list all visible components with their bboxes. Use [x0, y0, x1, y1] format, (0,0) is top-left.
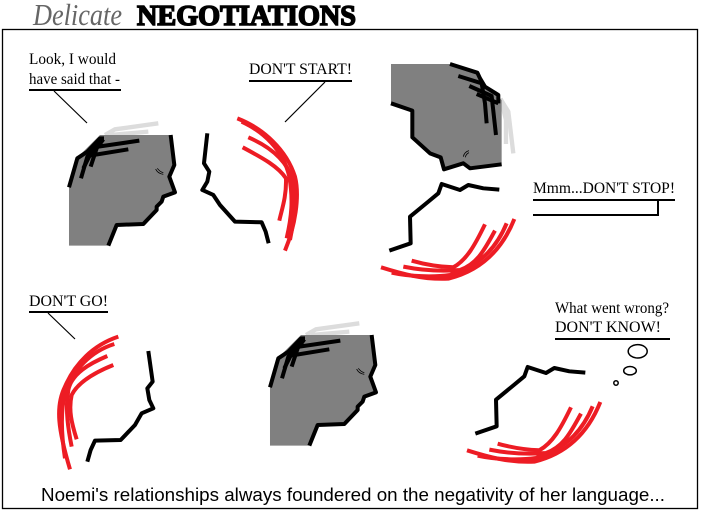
speech: look, I would have said that	[29, 51, 121, 123]
thought: what went wrong: What went wrong?	[555, 300, 669, 317]
panel: bottom-right scene	[467, 300, 670, 462]
thought: what went wrong: DON'T KNOW!	[555, 319, 661, 336]
speech: mmm don't stop: Mmm...DON'T STOP!	[533, 180, 675, 197]
title: NEGOTIATIONS	[137, 1, 356, 32]
panel: top-left scene	[29, 51, 352, 251]
speech: mmm don't stop	[533, 180, 675, 215]
speech: don't go	[29, 293, 108, 339]
thought: what went wrong	[555, 300, 670, 339]
figure: red-haired head lying below	[381, 184, 514, 279]
figure: grey head	[270, 323, 376, 446]
figure: grey head left	[69, 123, 175, 246]
thought bubbles	[614, 345, 647, 385]
speech: look, I would have said that: have said that -	[29, 71, 120, 88]
speech: don't start: DON'T START!	[249, 61, 352, 78]
speech: don't start	[249, 61, 352, 122]
title	[32, 0, 356, 32]
caption: Noemi's relationships always foundered on the negativity of her language...	[41, 485, 665, 505]
figure: red-haired head	[59, 337, 153, 469]
panel: top-right scene	[381, 64, 675, 279]
panel: bottom-left scene	[29, 293, 376, 469]
figure: red-haired head lying down	[467, 367, 600, 462]
figure: grey head lying on top	[391, 64, 513, 169]
speech: look, I would have said that: Look, I would	[29, 51, 116, 68]
figure: red-haired head right	[202, 118, 297, 251]
speech: don't go: DON'T GO!	[29, 293, 108, 310]
